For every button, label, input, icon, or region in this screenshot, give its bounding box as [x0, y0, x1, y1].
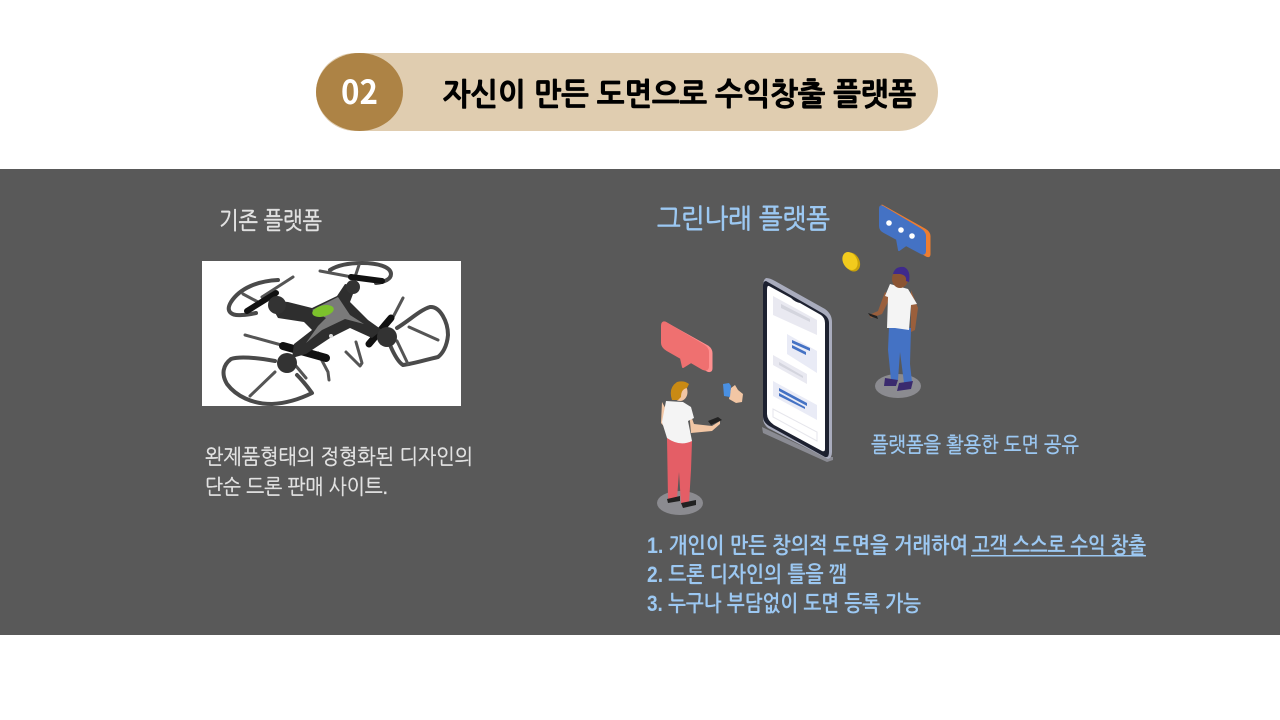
- description: existing platform: 완제품형태의 정형화된 디자인의: [205, 446, 473, 469]
- figure: man in blue trousers: [868, 267, 921, 398]
- image: drone: [202, 261, 461, 406]
- title text: 자신이 만든 도면으로 수익창출 플랫폼: [443, 77, 916, 112]
- description: existing platform: [205, 446, 473, 499]
- number badge: 02: [341, 66, 378, 114]
- list: platform benefits: [647, 533, 1146, 616]
- heading: Greennarae platform: 그린나래 플랫폼: [657, 204, 830, 234]
- title banner: [316, 53, 938, 131]
- list item 1: 1. 개인이 만든 창의적 도면을 거래하여: [647, 533, 968, 558]
- list item 1: 고객 스스로 수익 창출: [972, 533, 1146, 558]
- description: existing platform: 단순 드론 판매 사이트.: [205, 476, 388, 499]
- figure: woman in red trousers: [657, 381, 722, 515]
- icon: thumbs up: [723, 383, 743, 403]
- heading: existing platform: 기존 플랫폼: [219, 208, 322, 235]
- icon: red chat bubble: [662, 322, 712, 372]
- panel: dark comparison band: [0, 169, 1280, 635]
- icon: blue chat bubble: [880, 205, 930, 257]
- icon: smiley coin: [839, 249, 863, 274]
- list item 2: 2. 드론 디자인의 틀을 깸: [647, 562, 847, 587]
- illustration: phone sharing scene: [657, 205, 930, 515]
- icon: smartphone: [762, 278, 833, 462]
- caption: platform drawing sharing: 플랫폼을 활용한 도면 공유: [871, 434, 1079, 457]
- number badge: [316, 53, 403, 131]
- list item 3: 3. 누구나 부담없이 도면 등록 가능: [647, 591, 921, 616]
